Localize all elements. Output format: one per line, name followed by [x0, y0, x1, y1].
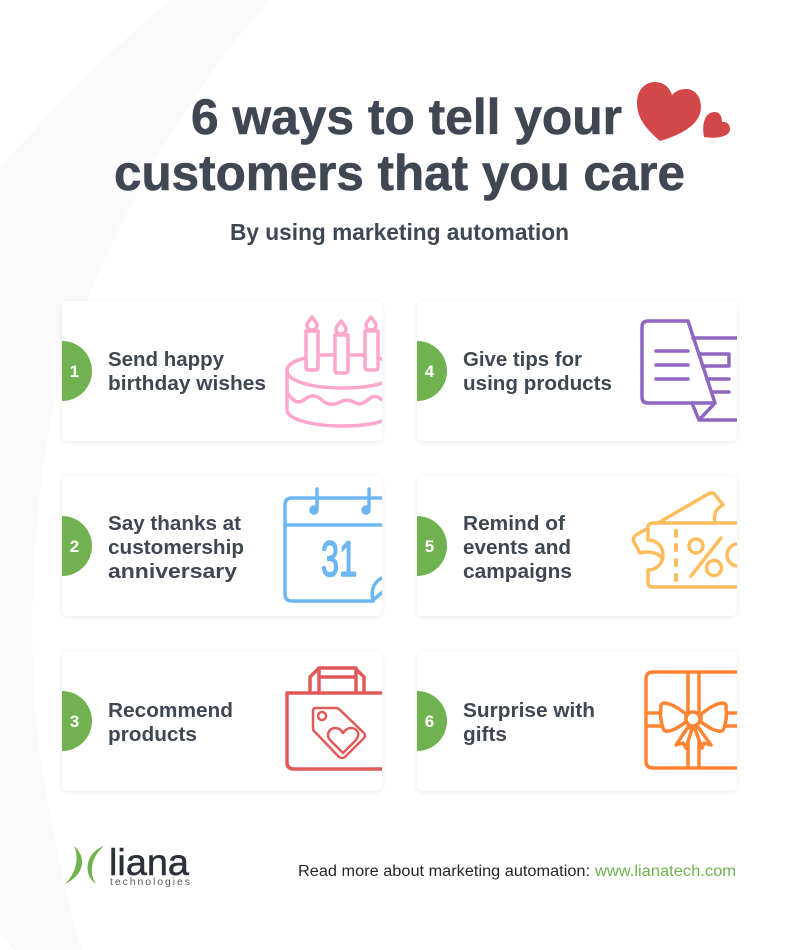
website link: www.lianatech.com: [594, 863, 736, 880]
panel: card 3 recommend products: [62, 651, 382, 791]
card text: Send happy: [108, 348, 225, 371]
icon: hearts: [637, 82, 730, 141]
card text: Recommend: [108, 699, 233, 722]
number badge 2: [32, 516, 92, 576]
number badge 5: 5: [425, 537, 434, 556]
panel: card 6 surprise gifts: [417, 651, 737, 791]
logo: liana technologies: technologies: [110, 876, 190, 888]
card text: using products: [463, 372, 612, 395]
card text: campaigns: [463, 560, 572, 583]
title line 1: 6 ways to tell your: [191, 89, 622, 145]
icon: calendar: [285, 489, 385, 601]
icon: shopping bag with tag: [287, 668, 385, 769]
card text: [463, 512, 572, 583]
number badge 3: [32, 691, 92, 751]
icon: discount ticket: [633, 493, 749, 587]
card text: Remind of: [463, 512, 565, 535]
title line 2: customers that you care: [114, 145, 685, 201]
panel: card 1 birthday wishes: [62, 301, 382, 441]
card text: [463, 348, 612, 395]
icon: document: [642, 321, 740, 420]
card text: customership: [108, 536, 244, 559]
panel: card 2 customership anniversary: [62, 476, 382, 616]
icon: birthday cake: [287, 317, 385, 426]
panel: card 4 product tips: [417, 301, 737, 441]
card text: events and: [463, 536, 571, 559]
logo: liana technologies: liana: [109, 842, 189, 883]
number badge 4: 4: [425, 362, 435, 381]
icon: gift box: [646, 672, 740, 768]
logo: liana technologies: [65, 842, 190, 888]
card text: Say thanks at: [108, 512, 241, 535]
number badge 1: [32, 341, 92, 401]
card text: birthday wishes: [108, 372, 266, 395]
number badge 4: [387, 341, 447, 401]
subtitle: By using marketing automation: [230, 219, 569, 245]
number badge 6: [387, 691, 447, 751]
card text: [463, 699, 595, 746]
card text: products: [108, 723, 197, 746]
header: title, subtitle and hearts: [114, 82, 730, 245]
read more line: Read more about marketing automation:: [298, 863, 590, 880]
card text: anniversary: [108, 560, 238, 583]
panel: card 5 events and campaigns: [417, 476, 737, 616]
card text: [108, 699, 233, 746]
number badge 3: 3: [70, 712, 79, 731]
card text: [108, 512, 244, 583]
card text: [108, 348, 266, 395]
card text: Surprise with: [463, 699, 595, 722]
card text: Give tips for: [463, 348, 582, 371]
number badge 1: 1: [70, 362, 79, 381]
card text: gifts: [463, 723, 507, 746]
calendar date: 31: [321, 531, 357, 587]
number badge 6: 6: [425, 712, 434, 731]
number badge 5: [387, 516, 447, 576]
number badge 2: 2: [70, 537, 79, 556]
footer: [65, 842, 736, 888]
